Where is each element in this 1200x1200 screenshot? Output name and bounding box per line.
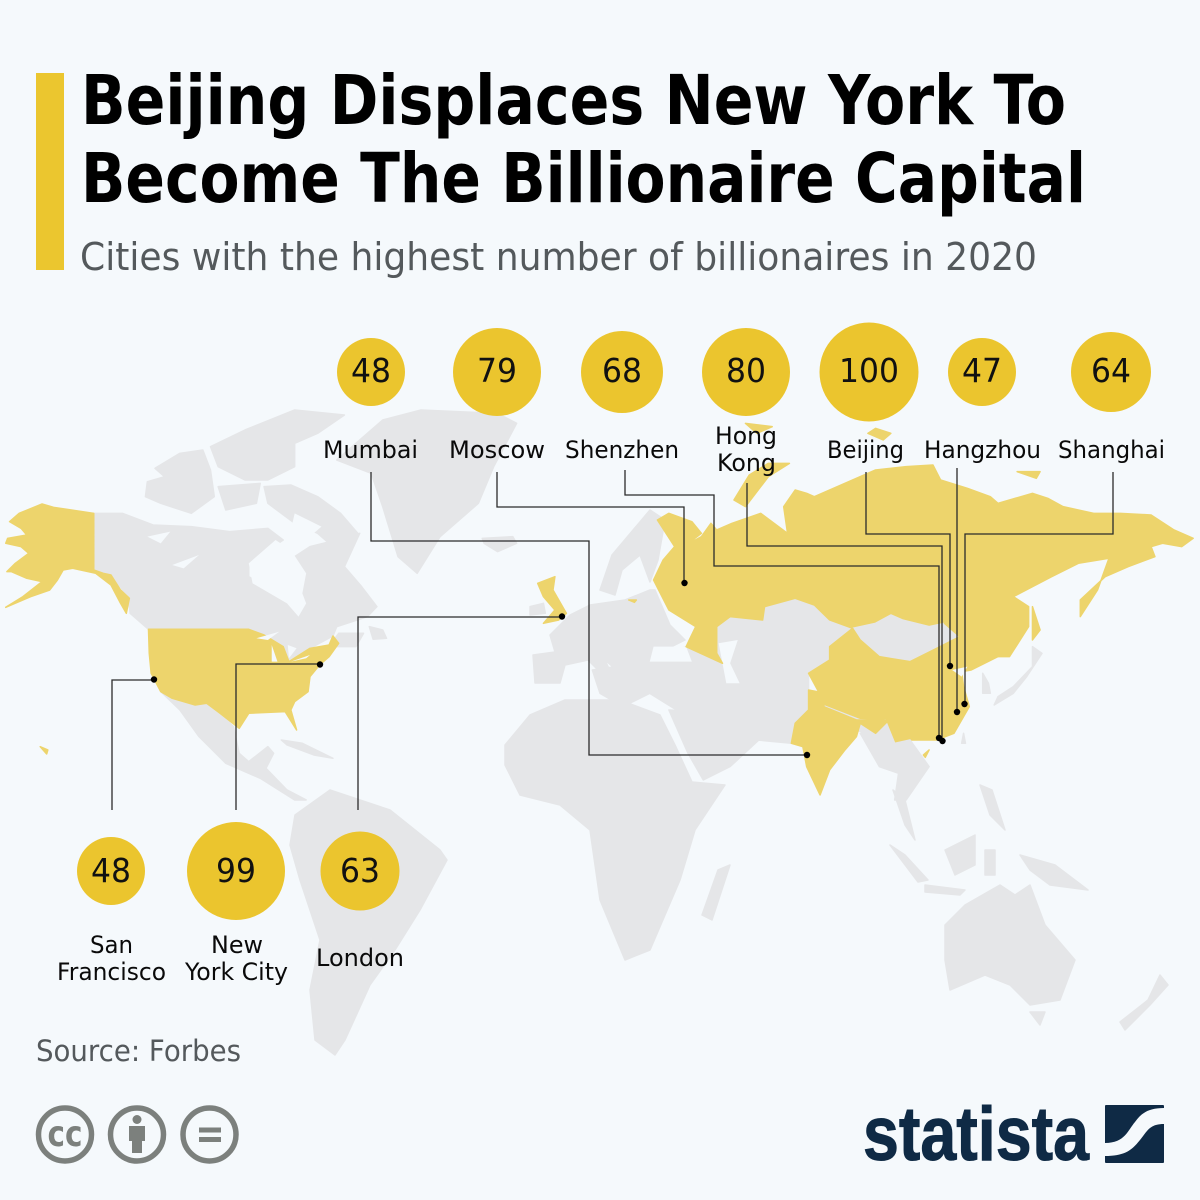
- icon: creative commons: cc: [48, 1114, 82, 1155]
- icon: no derivatives: [183, 1108, 236, 1161]
- bubble: Hangzhou: [948, 338, 1016, 406]
- label: Mumbai: Mumbai: [323, 436, 418, 464]
- line: San Francisco: [112, 680, 154, 810]
- bubble: New York City: [187, 822, 285, 920]
- bubble: Beijing: 100: [839, 351, 899, 390]
- title: [81, 61, 1086, 219]
- label: Shenzhen: Shenzhen: [565, 436, 679, 464]
- label: New York City: New: [211, 931, 263, 959]
- label: New York City: [184, 931, 288, 986]
- bubble: London: 63: [340, 851, 380, 890]
- bubble: Moscow: 79: [477, 351, 517, 390]
- label: New York City: York City: [184, 958, 288, 986]
- bubble: Mumbai: 48: [351, 351, 391, 390]
- label: Moscow: Moscow: [449, 436, 545, 464]
- line: Hangzhou: [956, 468, 958, 712]
- icon: attribution: [110, 1108, 164, 1161]
- bubble: London: [320, 832, 400, 910]
- map: Asia: [592, 423, 1193, 800]
- line: Mumbai: [371, 472, 807, 755]
- bubble: San Francisco: 48: [91, 851, 131, 890]
- source: Source: Forbes: [36, 1034, 241, 1068]
- label: Hong Kong: Hong: [715, 422, 777, 450]
- bubble: Shanghai: 64: [1091, 351, 1131, 390]
- bubble: Moscow: [453, 328, 541, 416]
- line: Shenzhen: [625, 470, 939, 738]
- bubble: Beijing: [820, 322, 918, 422]
- line: Shanghai: [965, 472, 1113, 704]
- bubble: Hong Kong: 80: [726, 351, 766, 390]
- line: Hong Kong: [747, 483, 942, 740]
- icon: creative commons: [38, 1108, 92, 1161]
- bubble: San Francisco: [77, 837, 145, 905]
- label: Hong Kong: [715, 422, 777, 477]
- city location dots: [151, 580, 968, 758]
- line: Moscow: [497, 472, 684, 583]
- bubble: Shenzhen: 68: [602, 351, 642, 390]
- title accent bar: [36, 73, 64, 270]
- label: San Francisco: Francisco: [57, 958, 166, 986]
- bubble: Shanghai: [1071, 332, 1151, 412]
- bubble: Shenzhen: [581, 331, 663, 413]
- statista logo: statista: [863, 1092, 1090, 1177]
- line: Beijing: [866, 472, 950, 666]
- map: Americas, North Atlantic: [6, 410, 566, 800]
- subtitle: Cities with the highest number of billionaires in 2020: [80, 235, 1037, 280]
- connector lines: [112, 468, 1113, 810]
- label: London: London: [316, 944, 404, 972]
- bubble: Hangzhou: 47: [962, 351, 1002, 390]
- map: South America, Africa, Europe, Oceania: [290, 510, 1168, 1055]
- icon: statista mark: [1105, 1105, 1164, 1163]
- line: New York City: [236, 664, 320, 810]
- label: Beijing: Beijing: [827, 436, 904, 464]
- label: San Francisco: [57, 931, 166, 986]
- label: San Francisco: San: [90, 931, 133, 959]
- label: Hong Kong: Kong: [717, 449, 776, 477]
- bubble: Mumbai: [337, 338, 405, 406]
- label: Shanghai: Shanghai: [1058, 436, 1165, 464]
- world map: [6, 410, 1193, 1055]
- line: London: [358, 617, 562, 810]
- label: Hangzhou: Hangzhou: [924, 436, 1041, 464]
- bubble: New York City: 99: [216, 851, 256, 890]
- bubble: Hong Kong: [702, 328, 790, 416]
